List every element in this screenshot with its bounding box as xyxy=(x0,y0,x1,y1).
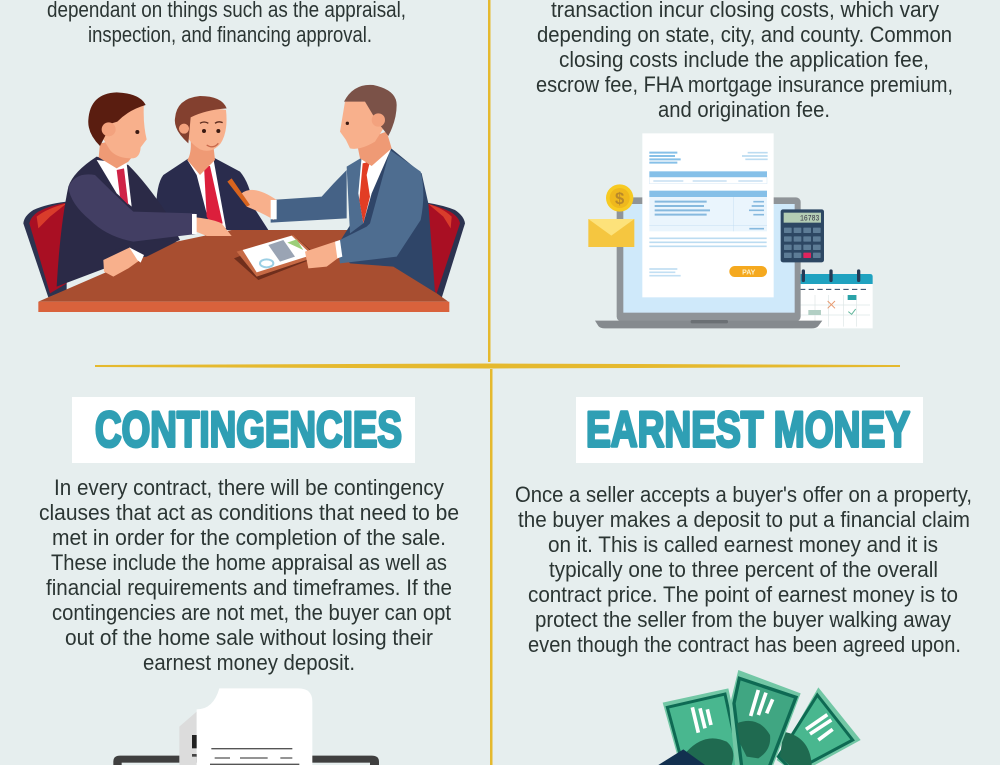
text block: contingencies: met in order for the completion of the sale. xyxy=(52,525,446,550)
text block: earnest money: protect the seller from the buyer walking away xyxy=(535,607,951,632)
text block: earnest money xyxy=(515,482,972,657)
calculator xyxy=(781,209,824,262)
text block: contingencies: contingencies are not met, the buyer can opt xyxy=(52,600,451,625)
wallet corner xyxy=(658,749,705,765)
illustration: three businessmen at a table xyxy=(23,85,465,312)
dollar coin: $ xyxy=(615,189,625,208)
center bill xyxy=(729,670,801,765)
text block: contingencies: out of the home sale without losing their xyxy=(65,625,433,650)
heading box: earnest money xyxy=(576,397,923,463)
pay button xyxy=(729,266,767,277)
text block: earnest money: the buyer makes a deposit to put a financial claim xyxy=(518,507,970,532)
right man's lower hand and cuff xyxy=(305,240,342,268)
text block: contingencies xyxy=(39,475,459,675)
text block: closing costs: escrow fee, FHA mortgage insurance premium, xyxy=(536,72,953,97)
text block: earnest money: on it. This is called earnest money and it is xyxy=(548,532,938,557)
invoice sheet xyxy=(642,133,774,297)
text block: closing costs: closing costs include the application fee, xyxy=(559,47,929,72)
text block: earnest money: even though the contract has been agreed upon. xyxy=(528,632,961,657)
text block: closing costs: depending on state, city, and county. Common xyxy=(537,22,952,47)
calculator: 16783 xyxy=(800,214,819,223)
text block: contingencies: In every contract, there will be contingency xyxy=(54,475,444,500)
text block: top left: inspection, and financing approval. xyxy=(88,22,372,47)
text block: contingencies: clauses that act as conditions that need to be xyxy=(39,500,459,525)
text block: closing costs: and origination fee. xyxy=(658,97,830,122)
text block: earnest money: typically one to three percent of the overall xyxy=(549,557,938,582)
illustration: green money bills xyxy=(658,670,861,765)
right man xyxy=(242,85,435,292)
left bill xyxy=(663,688,745,765)
clipboard with contract xyxy=(234,235,318,280)
text block: earnest money: Once a seller accepts a buyer's offer on a property, xyxy=(515,482,972,507)
text block: closing costs xyxy=(536,0,953,122)
table xyxy=(38,230,449,312)
right bill xyxy=(777,687,861,765)
envelope xyxy=(588,219,634,247)
heading box: contingencies xyxy=(72,397,415,463)
dollar coin xyxy=(606,184,633,212)
left chair xyxy=(23,202,67,297)
right chair xyxy=(427,203,465,298)
text block: contingencies: financial requirements and timeframes. If the xyxy=(46,575,452,600)
pen xyxy=(227,178,250,207)
illustration: laptop invoice with calculator and calendar xyxy=(588,133,873,328)
middle man xyxy=(156,96,268,230)
left man's hands on table xyxy=(103,214,232,277)
text block: contingencies: These include the home appraisal as well as xyxy=(51,550,447,575)
left man xyxy=(57,92,196,287)
pay button: PAY xyxy=(742,269,756,276)
laptop xyxy=(595,197,822,328)
text block: contingencies: earnest money deposit. xyxy=(143,650,355,675)
calendar xyxy=(793,269,873,328)
heading box: contingencies: CONTINGENCIES xyxy=(95,402,402,458)
text block: earnest money: contract price. The point of earnest money is to xyxy=(528,582,958,607)
illustration: contract on laptop xyxy=(113,688,379,765)
text block: top left xyxy=(47,0,406,47)
